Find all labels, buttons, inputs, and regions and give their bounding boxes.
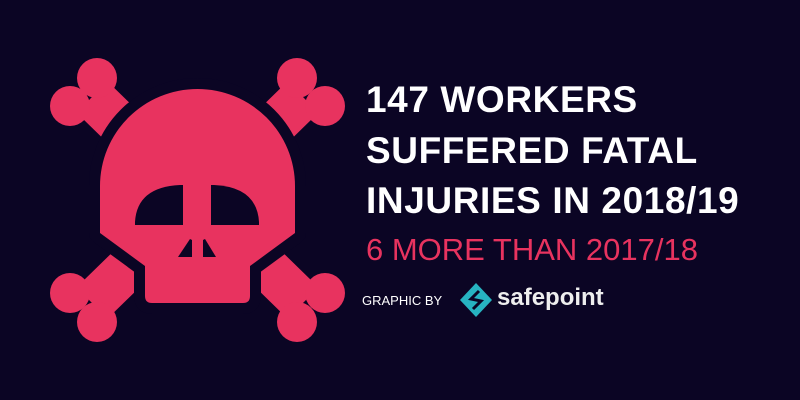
skull — [100, 89, 295, 303]
credit: graphic by safepoint: safepoint — [497, 284, 604, 311]
headline — [366, 79, 739, 267]
headline: INJURIES IN 2018/19 — [366, 180, 739, 221]
bone: top-right to bottom-left — [50, 58, 345, 342]
credit: graphic by safepoint: GRAPHIC BY — [362, 293, 442, 308]
headline: 147 WORKERS — [366, 79, 638, 120]
bone: top-left to bottom-right — [50, 58, 345, 342]
icon: skull and crossbones — [50, 58, 345, 342]
credit: graphic by safepoint — [362, 283, 604, 317]
headline: SUFFERED FATAL — [366, 130, 698, 171]
icon: safepoint logo — [460, 283, 492, 317]
nose — [178, 239, 192, 257]
eyes — [135, 185, 183, 225]
subheading: 6 MORE THAN 2017/18 — [366, 232, 698, 267]
